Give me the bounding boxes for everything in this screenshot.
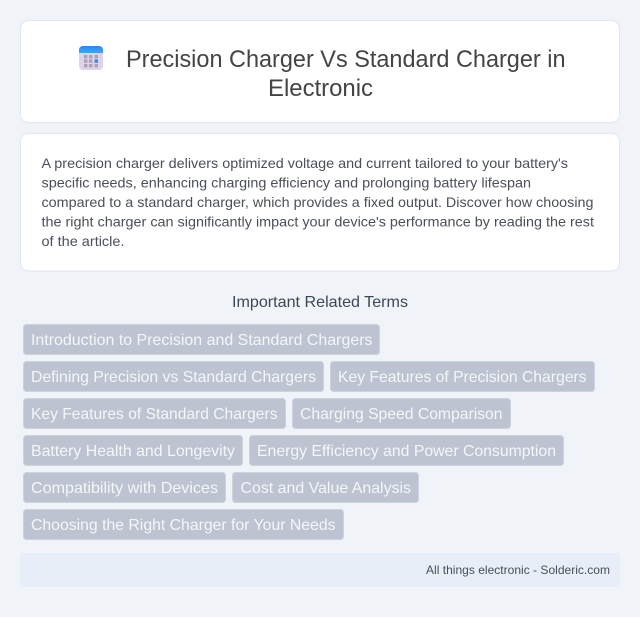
text block: introduction paragraph: the right charger can significantly impact your device's performance by reading the rest <box>42 214 594 230</box>
tag: defining: Defining Precision vs Standard Chargers <box>31 369 316 386</box>
tag: cost: Cost and Value Analysis <box>240 480 411 497</box>
title: Electronic <box>268 75 373 102</box>
tag: choosing: Choosing the Right Charger for Your Needs <box>31 517 336 534</box>
tag: introduction <box>24 324 380 354</box>
tag: standard features: Key Features of Standard Chargers <box>31 406 278 423</box>
title <box>126 46 566 102</box>
tag: defining <box>24 362 324 392</box>
tag: energy efficiency: Energy Efficiency and Power Consumption <box>257 443 556 460</box>
footer <box>20 553 620 587</box>
text block: introduction paragraph <box>42 155 594 249</box>
tag: compatibility: Compatibility with Devices <box>31 480 218 497</box>
tag: charging speed: Charging Speed Comparison <box>300 406 502 423</box>
tag: precision features: Key Features of Precision Chargers <box>338 369 586 386</box>
panel: title header <box>20 20 620 122</box>
tag: energy efficiency <box>250 436 564 466</box>
text block: introduction paragraph: A precision charger delivers optimized voltage and current tailored to your battery's <box>42 155 568 171</box>
tag: choosing <box>24 510 344 540</box>
tag: battery health <box>24 436 242 466</box>
tag: standard features <box>24 398 286 428</box>
text block: introduction paragraph: specific needs, enhancing charging efficiency and prolonging battery lifespan <box>42 174 531 190</box>
tag: precision features <box>330 362 594 392</box>
text block: introduction paragraph: of the article. <box>42 233 125 249</box>
tag: cost <box>232 472 418 502</box>
footer: All things electronic - Solderic.com <box>426 563 610 577</box>
tag: charging speed <box>292 398 510 428</box>
text block: introduction paragraph: compared to a standard charger, which provides a fixed output. Discover how choosing <box>42 194 594 210</box>
panel: introduction <box>20 134 620 271</box>
title: Precision Charger Vs Standard Charger in <box>126 46 566 73</box>
icon: calendar <box>79 46 103 70</box>
tag: battery health: Battery Health and Longevity <box>31 443 235 460</box>
heading: important related terms: Important Related Terms <box>232 294 408 311</box>
tag: introduction: Introduction to Precision and Standard Chargers <box>31 332 372 349</box>
tag: compatibility <box>24 472 226 502</box>
